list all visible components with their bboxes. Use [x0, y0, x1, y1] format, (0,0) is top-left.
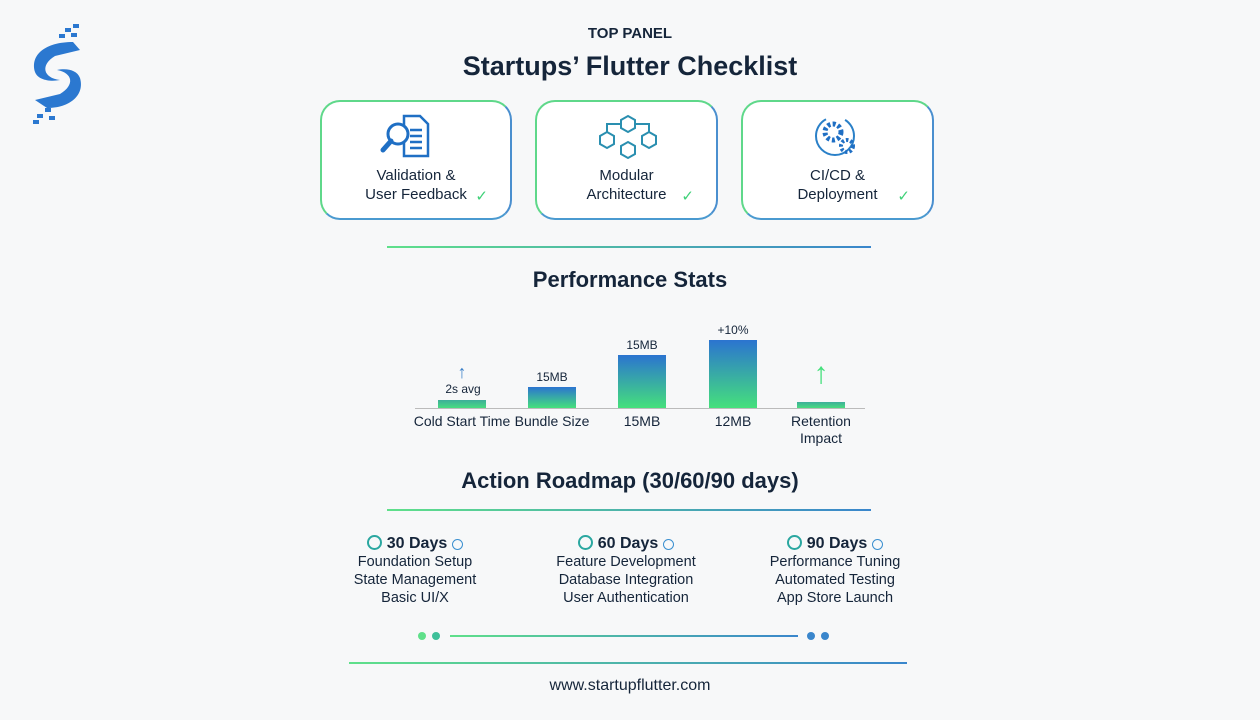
roadmap: 30 days: 30 Days [387, 535, 447, 552]
bar: 15MB [618, 355, 666, 408]
card: modular: Modular [599, 167, 654, 184]
bar: retention [797, 402, 845, 408]
title: Startups’ Flutter Checklist [463, 51, 797, 81]
card: validation [320, 100, 512, 220]
top panel label: TOP PANEL [588, 25, 672, 42]
roadmap: 60 days: User Authentication [563, 590, 689, 606]
bar chart: 15MB [626, 338, 658, 352]
card: modular: ✓ [681, 188, 694, 205]
bar: 12MB [709, 340, 757, 408]
bar chart: 15MB [536, 370, 568, 384]
card: cicd [741, 100, 934, 220]
roadmap: 30 days: State Management [354, 572, 476, 588]
card: cicd: ✓ [897, 188, 910, 205]
card: cicd: Deployment [797, 186, 878, 203]
roadmap: 90 days: 90 Days [807, 535, 867, 552]
icon: gears [815, 118, 855, 156]
bar chart: +10% [717, 323, 749, 337]
card: modular: Architecture [586, 186, 667, 203]
bar chart: 2s avg [445, 382, 481, 396]
roadmap: 90 days: App Store Launch [777, 590, 893, 606]
footer url: www.startupflutter.com [550, 677, 710, 694]
divider [387, 509, 871, 511]
roadmap: 60 days [556, 535, 696, 606]
roadmap: 90 days [770, 535, 900, 606]
card: modular [535, 100, 718, 220]
roadmap: 30 days [354, 535, 476, 606]
bar chart: 15MB [624, 413, 660, 429]
bar chart: 12MB [715, 413, 751, 429]
bar chart: Cold Start Time [414, 413, 510, 429]
bar chart: ↑ [458, 362, 466, 382]
card: validation: Validation & [377, 167, 455, 184]
timeline [418, 632, 829, 640]
roadmap: 90 days: Automated Testing [775, 572, 895, 588]
bar chart: ↑ [814, 357, 828, 390]
card: validation: User Feedback [365, 186, 467, 203]
roadmap: 60 days: Feature Development [556, 554, 696, 570]
roadmap: 60 days: Database Integration [559, 572, 693, 588]
icon: magnifier document [380, 114, 430, 158]
card: validation: ✓ [475, 188, 488, 205]
footer line [349, 662, 907, 664]
bar chart: Retention [791, 413, 851, 429]
roadmap: 90 days: Performance Tuning [770, 554, 900, 570]
roadmap: 60 days: 60 Days [598, 535, 658, 552]
logo [33, 24, 81, 124]
bar chart: Impact [800, 430, 842, 446]
heading: performance stats: Performance Stats [533, 267, 727, 292]
divider [387, 246, 871, 248]
icon: cubes [599, 114, 657, 160]
bar chart: Bundle Size [515, 413, 589, 429]
roadmap: 30 days: Basic UI/X [381, 590, 449, 606]
bar: cold start [438, 400, 486, 408]
card: cicd: CI/CD & [810, 167, 865, 184]
roadmap: 30 days: Foundation Setup [358, 554, 472, 570]
bar: bundle [528, 387, 576, 408]
bar chart [414, 323, 865, 446]
heading: roadmap: Action Roadmap (30/60/90 days) [461, 468, 799, 493]
